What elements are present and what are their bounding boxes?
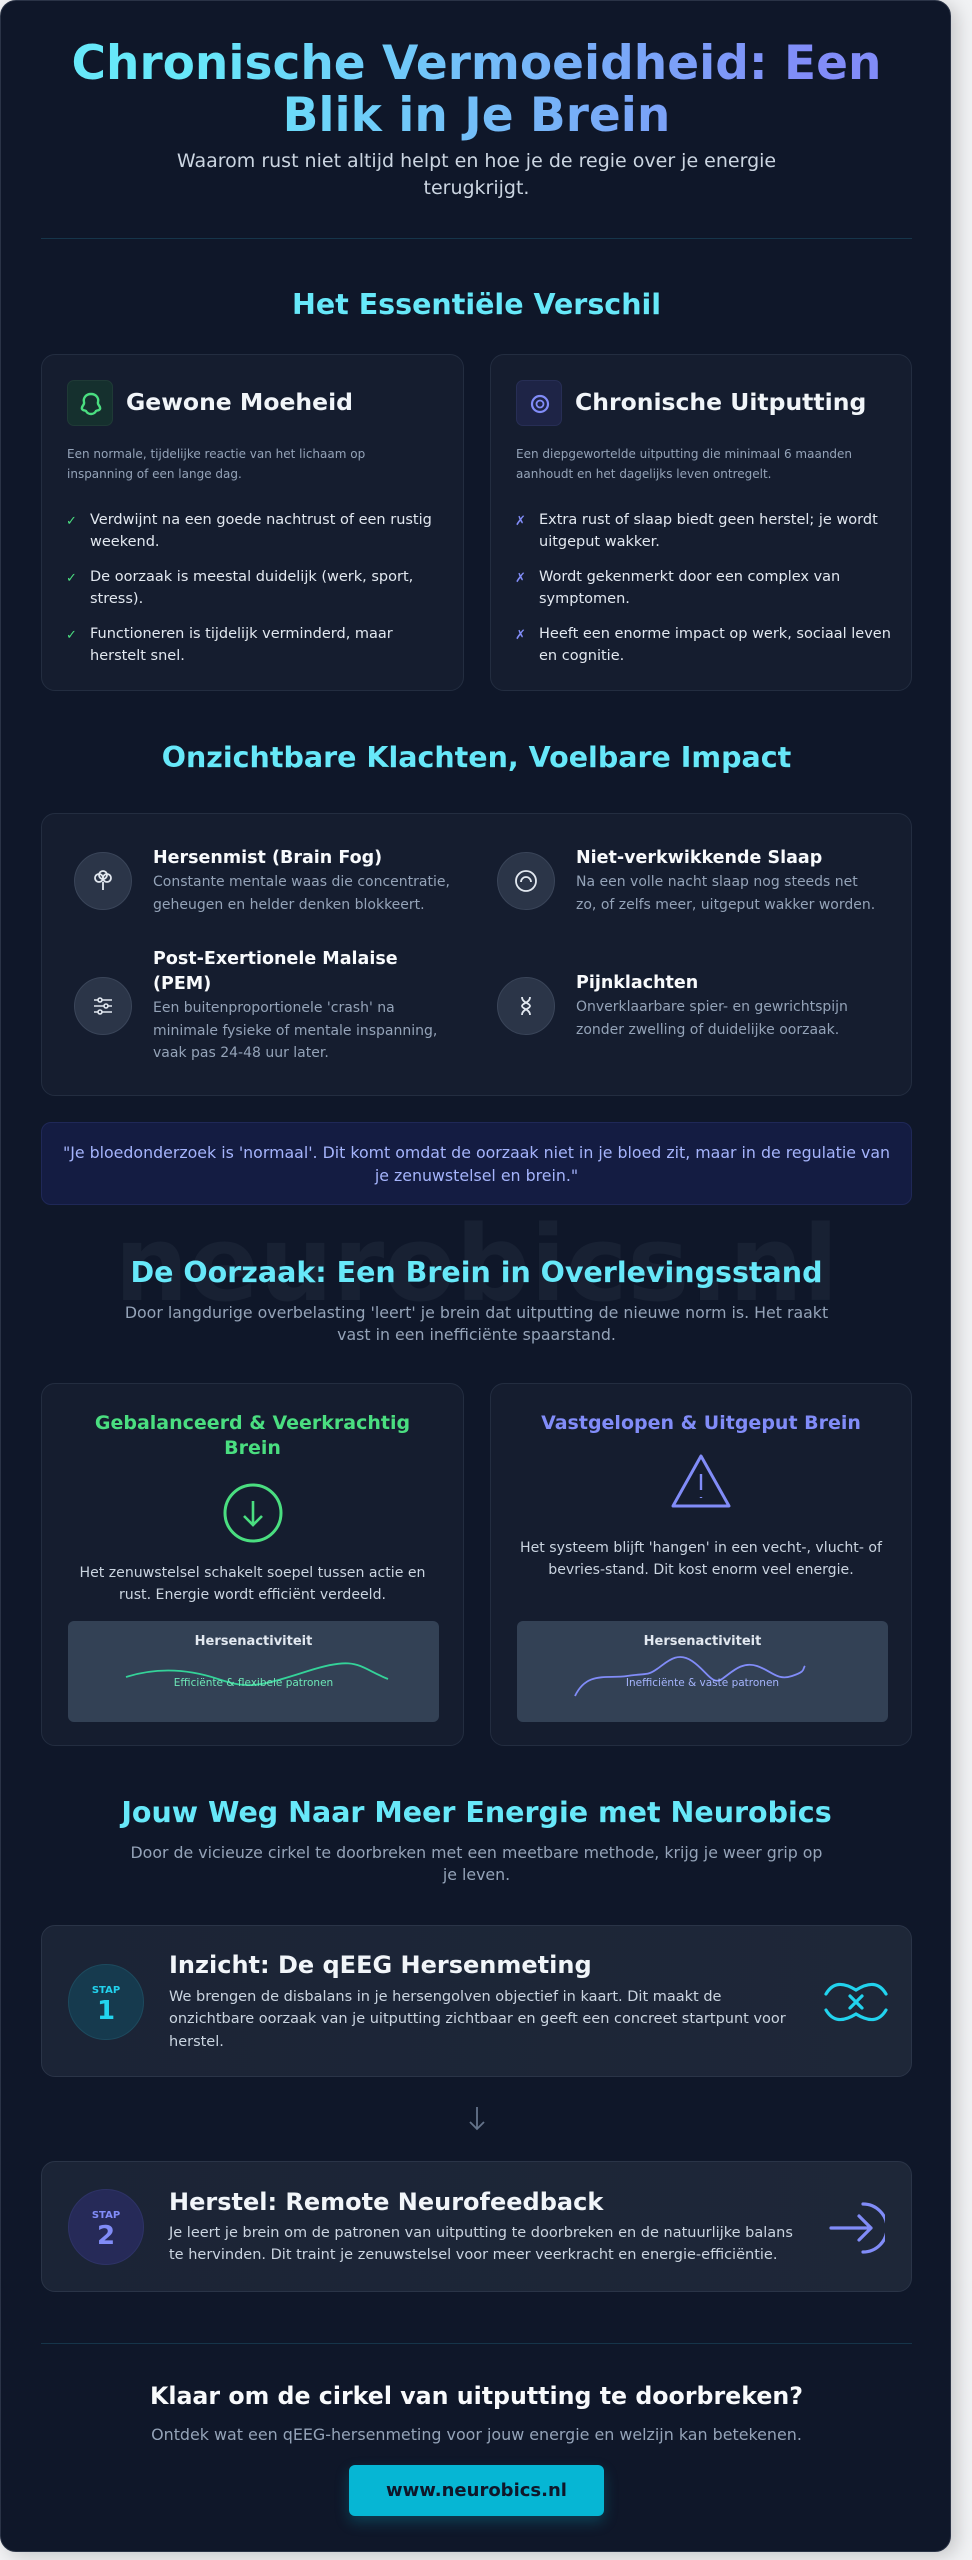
subtitle: vast in een inefficiënte spaarstand.	[337, 1325, 616, 1344]
CTA button: www.neurobics.nl	[386, 2480, 567, 2501]
arrow down	[470, 2107, 484, 2130]
symptom: PEM: Een buitenproportionele 'crash' na	[153, 1000, 395, 1016]
chart: brain activity: Efficiënte & flexibele patronen	[174, 1677, 333, 1689]
card title: Gewone Moeheid	[126, 388, 353, 416]
symptom: PEM: vaak pas 24-48 uur later.	[153, 1045, 329, 1061]
symptom: brain fog: Constante mentale waas die concentratie,	[153, 874, 450, 890]
subtitle: je leven.	[443, 1865, 510, 1884]
panel: chronische uitputting: Heeft een enorme impact op werk, sociaal leven en cognitie.	[539, 626, 891, 664]
bullets: Extra rust of slaap biedt geen herstel; je wordt uitgeput wakker.	[539, 512, 878, 550]
step 1	[41, 1925, 912, 2077]
step desc: herstel.	[169, 2034, 224, 2050]
symptom: pain: Pijnklachten	[576, 973, 698, 993]
watermark: neurobics.nl	[114, 1203, 839, 1325]
symptom: pain	[497, 973, 848, 1038]
symptom: PEM	[74, 949, 437, 1061]
bullets: Verdwijnt na een goede nachtrust of een rustig weekend.	[90, 512, 432, 550]
callout: quote	[41, 1122, 912, 1205]
desc: Het systeem blijft 'hangen' in een vecht-, vlucht- of	[520, 1540, 882, 1556]
step desc	[169, 1989, 786, 2050]
step desc: te hervinden. Dit traint je zenuwstelsel voor meer veerkracht en energie-efficiëntie.	[169, 2247, 777, 2263]
subtitle	[125, 1303, 828, 1344]
panel: chronische uitputting: ✗	[515, 571, 526, 586]
symptom: brain fog: geheugen en helder denken blokkeert.	[153, 896, 425, 912]
panel: gewone moeheid: ✓	[66, 628, 77, 643]
icon: wave x	[824, 1982, 888, 2022]
card desc: Een normale, tijdelijke reactie van het lichaam op inspanning of een lange dag.	[67, 447, 365, 481]
symptom: PEM: Post-Exertionele Malaise	[153, 949, 398, 969]
symptom: sleep	[497, 848, 875, 912]
chart: brain activity: Hersenactiviteit	[644, 1634, 761, 1649]
desc: bevries-stand. Dit kost enorm veel energie.	[548, 1562, 854, 1578]
card desc: Een diepgewortelde uitputting die minimaal 6 maanden aanhoudt en het dagelijks leven ontregelt.	[516, 447, 852, 481]
symptom: pain: Onverklaarbare spier- en gewrichtspijn	[576, 999, 848, 1015]
icon: green	[67, 380, 113, 426]
panel: chronische uitputting: Wordt gekenmerkt door een complex van symptomen.	[539, 569, 840, 607]
chart: brain activity	[517, 1621, 888, 1722]
callout: quote: "Je bloedonderzoek is 'normaal'. Dit komt omdat de oorzaak niet in je bloed zit, maar in de regulatie van	[63, 1143, 890, 1162]
panel: exhausted brain	[490, 1383, 912, 1746]
heading: De Oorzaak: De Oorzaak: Een Brein in Overlevingsstand	[130, 1256, 822, 1289]
icon: down circle	[224, 1484, 282, 1542]
icon: purple	[516, 380, 562, 426]
panel: balanced brain	[41, 1383, 464, 1746]
subtitle: Door langdurige overbelasting 'leert' je brein dat uitputting de nieuwe norm is. Het raakt	[125, 1303, 828, 1322]
subtitle: Door de vicieuze cirkel te doorbreken met een meetbare methode, krijg je weer grip op	[131, 1843, 822, 1862]
bullets: ✗	[515, 514, 526, 529]
badge 1: STAP	[92, 1985, 120, 1996]
step desc: onzichtbare oorzaak van je uitputting zichtbaar en geeft een concreet startpunt voor	[169, 2011, 786, 2027]
desc	[80, 1565, 425, 1602]
subtitle	[177, 150, 776, 199]
chart: brain activity: Inefficiënte & vaste patronen	[626, 1677, 779, 1689]
subtitle	[131, 1843, 822, 1884]
desc	[520, 1540, 882, 1578]
title: Chronische Vermoeidheid: Een	[72, 36, 881, 91]
title: Blik in Je Brein	[283, 88, 670, 143]
symptom: sleep: Niet-verkwikkende Slaap	[576, 848, 822, 868]
panel: gewone moeheid	[41, 354, 464, 691]
badge 2: 2	[97, 2221, 115, 2251]
heading: Jouw Weg: Jouw Weg Naar Meer Energie met Neurobics	[121, 1796, 832, 1829]
desc: Het zenuwstelsel schakelt soepel tussen actie en	[80, 1565, 425, 1581]
step 2	[41, 2161, 912, 2292]
desc: rust. Energie wordt efficiënt verdeeld.	[119, 1586, 386, 1602]
symptom: brain fog: Hersenmist (Brain Fog)	[153, 848, 382, 868]
subtitle: terugkrijgt.	[424, 177, 529, 199]
badge 2	[68, 2189, 144, 2265]
heading: Onzichtbare Klachten: Onzichtbare Klachten, Voelbare Impact	[162, 741, 791, 774]
bullets: ✓	[66, 514, 77, 529]
CTA button	[349, 2465, 604, 2516]
callout: quote: je zenuwstelsel en brein."	[375, 1166, 578, 1185]
card title: Vastgelopen & Uitgeput Brein	[541, 1412, 861, 1434]
symptom: pain: zonder zwelling of duidelijke oorzaak.	[576, 1022, 839, 1038]
badge 1	[68, 1964, 144, 2040]
step desc: We brengen de disbalans in je hersengolven objectief in kaart. Dit maakt de	[169, 1989, 721, 2005]
badge 2: STAP	[92, 2210, 120, 2221]
subtitle: Waarom rust niet altijd helpt en hoe je de regie over je energie	[177, 150, 776, 172]
step title: Inzicht: De qEEG Hersenmeting	[169, 1951, 592, 1979]
symptom: PEM: (PEM)	[153, 974, 211, 994]
card title: Brein	[224, 1437, 281, 1459]
symptom: sleep: Na een volle nacht slaap nog steeds net	[576, 874, 858, 890]
card title	[95, 1412, 410, 1459]
CTA text: Ontdek wat een qEEG-hersenmeting voor jouw energie en welzijn kan betekenen.	[151, 2425, 802, 2444]
panel: gewone moeheid: ✓	[66, 571, 77, 586]
symptom: PEM: minimale fysieke of mentale inspanning,	[153, 1023, 437, 1039]
chart: brain activity	[68, 1621, 439, 1722]
step title: Herstel: Remote Neurofeedback	[169, 2188, 603, 2216]
panel: gewone moeheid: De oorzaak is meestal duidelijk (werk, sport, stress).	[90, 569, 413, 607]
chart: brain activity: Hersenactiviteit	[195, 1634, 312, 1649]
icon: warning triangle	[672, 1454, 730, 1508]
card title: Gebalanceerd & Veerkrachtig	[95, 1412, 410, 1434]
badge 1: 1	[97, 1996, 115, 2026]
CTA heading: Klaar om de cirkel van uitputting te doorbreken?	[150, 2382, 803, 2410]
step desc: Je leert je brein om de patronen van uitputting te doorbreken en de natuurlijke balans	[169, 2225, 793, 2241]
symptom: sleep: zo, of zelfs meer, uitgeput wakker worden.	[576, 896, 875, 912]
panel: chronische uitputting	[490, 354, 912, 691]
icon: arrow in	[829, 2202, 885, 2254]
panel: chronische uitputting: ✗	[515, 628, 526, 643]
panel: symptoms	[41, 813, 912, 1096]
card title: Chronische Uitputting	[575, 388, 866, 416]
panel: gewone moeheid: Functioneren is tijdelijk verminderd, maar herstelt snel.	[90, 626, 393, 664]
title	[1, 38, 952, 142]
step desc	[168, 2225, 793, 2263]
heading: Het Essentiële Verschil: Het Essentiële Verschil	[292, 288, 661, 321]
symptom: brain fog	[74, 848, 450, 912]
